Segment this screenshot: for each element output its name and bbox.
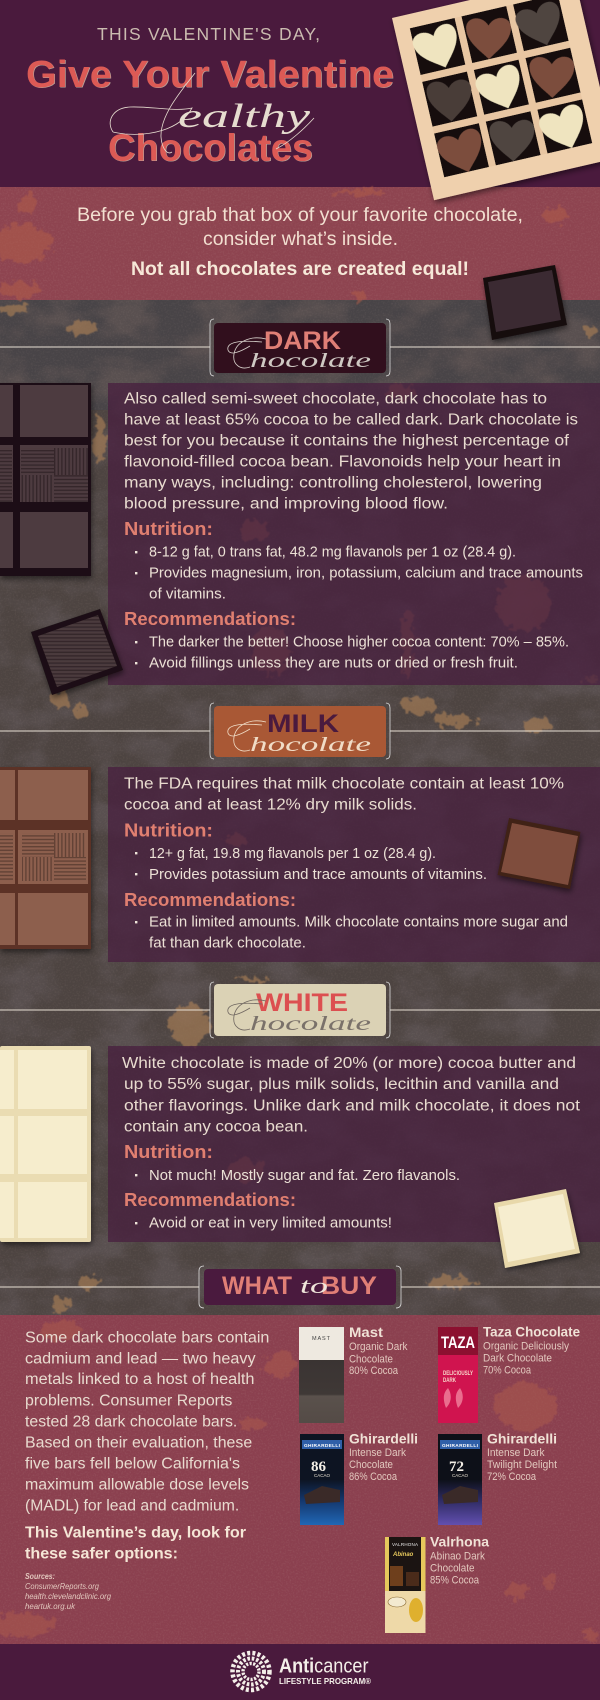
dark nutrition list: Provides magnesium, iron, potassium, calcium and trace amounts — [149, 566, 583, 582]
Ghirardelli 72 label — [487, 1430, 557, 1483]
Ghirardelli 72 label: Ghirardelli — [487, 1430, 557, 1446]
icon: milk chocolate square — [498, 818, 580, 889]
Ghirardelli 72 label: Twilight Delight — [487, 1459, 557, 1471]
milk recommendations list — [135, 915, 568, 952]
dark nutrition list: 8-12 g fat, 0 trans fat, 48.2 mg flavanols per 1 oz (28.4 g). — [149, 545, 516, 561]
image: Ghirardelli 72 bar: 72 — [449, 1459, 464, 1475]
text block: safer options call to action — [25, 1524, 246, 1562]
Ghirardelli 86 label — [349, 1430, 418, 1483]
text block: safer options call to action: these safer options: — [25, 1545, 178, 1562]
text block: safer options call to action: This Valentine’s day, look for — [25, 1524, 246, 1541]
image: Taza bar: DARK — [443, 1378, 456, 1384]
logo wordmark: LIFESTYLE PROGRAM® — [279, 1676, 372, 1686]
milk recommendations heading: Recommendations: — [124, 890, 296, 910]
intro text line 1: Before you grab that box of your favorite chocolate, — [77, 205, 523, 226]
text block: sources: heartuk.org.uk — [25, 1601, 76, 1611]
image: Ghirardelli 86 bar: GHIRARDELLI — [304, 1443, 341, 1449]
white description: other flavorings. Unlike dark and milk chocolate, it does not — [124, 1098, 581, 1115]
milk description: cocoa and at least 12% dry milk solids. — [124, 796, 417, 813]
dark description: have at least 65% cocoa to be called dark. Dark chocolate is — [124, 411, 578, 428]
text block: what to buy description: tested 28 dark chocolate bars. — [25, 1413, 237, 1430]
Mast label: Chocolate — [349, 1353, 393, 1365]
Valrhona label: Valrhona — [430, 1534, 489, 1550]
panel: white chocolate — [108, 1046, 600, 1242]
Ghirardelli 86 label: 86% Cocoa — [349, 1471, 398, 1483]
image: Ghirardelli 72 bar: CACAO — [452, 1473, 469, 1478]
icon: Anticancer logo mark — [232, 1653, 270, 1690]
script word Chocolate: hocolate — [250, 1013, 371, 1035]
panel: dark chocolate — [108, 383, 600, 685]
Taza label: Taza Chocolate — [483, 1324, 580, 1340]
band: introduction — [0, 187, 600, 301]
icon: small dark chocolate piece — [31, 609, 123, 695]
milk nutrition heading: Nutrition: — [124, 821, 213, 841]
Ghirardelli 86 label: Ghirardelli — [349, 1430, 418, 1446]
Valrhona label: Chocolate — [430, 1562, 474, 1574]
image: Ghirardelli 86 bar — [300, 1434, 344, 1525]
product: Taza — [438, 1324, 580, 1423]
icon: white chocolate square — [494, 1189, 580, 1268]
Mast label: Mast — [349, 1324, 383, 1340]
main title line 2: Chocolates — [109, 128, 314, 170]
white description: contain any cocoa bean. — [124, 1119, 308, 1136]
heading word DARK: DARK — [264, 327, 341, 355]
image: Mast bar: MAST — [312, 1336, 331, 1342]
milk description — [124, 775, 564, 813]
main title line 2: Chocolates — [108, 128, 313, 170]
script word Healthy — [110, 73, 314, 153]
image: Ghirardelli 72 bar: GHIRARDELLI — [442, 1443, 479, 1449]
dark description: best for you because it contains the highest percentage of — [124, 432, 570, 449]
text block: sources: health.clevelandclinic.org — [25, 1591, 111, 1601]
milk nutrition list: Provides potassium and trace amounts of vitamins. — [149, 867, 487, 883]
dark recommendations heading: Recommendations: — [124, 609, 296, 629]
image: Ghirardelli 72 bar — [438, 1434, 482, 1525]
white description — [122, 1055, 581, 1136]
dark recommendations list: Avoid fillings unless they are nuts or dried or fresh fruit. — [149, 656, 518, 672]
intro emphasis: Not all chocolates are created equal! — [131, 259, 469, 280]
milk recommendations list: Eat in limited amounts. Milk chocolate contains more sugar and — [149, 915, 568, 931]
Ghirardelli 72 label: 72% Cocoa — [487, 1471, 537, 1483]
footer — [0, 1644, 600, 1700]
script word Chocolate — [228, 1000, 371, 1035]
image: Ghirardelli 86 bar: 86 — [311, 1459, 326, 1475]
main title line 1: Give Your Valentine — [27, 55, 395, 97]
Mast label: 80% Cocoa — [349, 1365, 399, 1377]
icon: dark chocolate square — [483, 265, 567, 340]
white recommendations list: Avoid or eat in very limited amounts! — [149, 1216, 392, 1232]
image: Valrhona bar: VALRHONA — [392, 1542, 418, 1547]
product: Valrhona — [385, 1534, 489, 1633]
Valrhona label: 85% Cocoa — [430, 1574, 480, 1586]
heading: what to buy — [0, 1266, 600, 1308]
product: Ghirardelli 86 — [300, 1430, 418, 1525]
text block: what to buy description: problems. Consumer Reports — [25, 1392, 233, 1409]
dark recommendations list — [135, 635, 569, 672]
image: Valrhona bar: Abinao — [392, 1552, 414, 1558]
Valrhona label — [430, 1534, 489, 1586]
white nutrition list: Not much! Mostly sugar and fat. Zero flavanols. — [149, 1168, 460, 1184]
text block: sources: ConsumerReports.org — [25, 1581, 99, 1591]
Ghirardelli 72 label: Intense Dark — [487, 1447, 545, 1459]
text block: sources: Sources: — [25, 1571, 55, 1581]
band: what to buy background — [0, 1315, 600, 1644]
product: Mast — [299, 1324, 408, 1423]
product: Ghirardelli 72 — [438, 1430, 557, 1525]
Valrhona label: Abinao Dark — [430, 1550, 485, 1562]
text block: what to buy description: (MADL) for lead and cadmium. — [25, 1497, 239, 1514]
script word Chocolate — [228, 338, 371, 372]
script word Chocolate: hocolate — [250, 734, 371, 756]
heading: dark chocolate — [0, 319, 600, 376]
milk description: The FDA requires that milk chocolate contain at least 10% — [124, 775, 564, 792]
Taza label: Dark Chocolate — [483, 1352, 552, 1364]
image: Valrhona bar — [385, 1537, 426, 1633]
white description: up to 55% sugar, plus milk solids, lecithin and vanilla and — [124, 1076, 559, 1093]
text block: what to buy description: five bars fell below California's — [25, 1455, 240, 1472]
Ghirardelli 86 label: Intense Dark — [349, 1447, 406, 1459]
dark nutrition list — [135, 545, 583, 602]
dark description: flavonoid-filled cocoa bean. Flavonoids help your heart in — [124, 454, 561, 471]
dark nutrition heading: Nutrition: — [124, 519, 213, 539]
heading word BUY: BUY — [321, 1272, 377, 1300]
dark description: blood pressure, and improving blood flow. — [124, 496, 448, 513]
dark recommendations list: The darker the better! Choose higher cocoa content: 70% – 85%. — [149, 635, 569, 651]
milk nutrition list: 12+ g fat, 19.8 mg flavanols per 1 oz (28.4 g). — [149, 846, 436, 862]
milk recommendations list: fat than dark chocolate. — [149, 936, 306, 952]
dark description: many ways, including: controlling cholesterol, lowering — [124, 475, 542, 492]
heading word WHAT: WHAT — [222, 1272, 292, 1300]
intro text line 2: consider what’s inside. — [203, 229, 398, 250]
white nutrition heading: Nutrition: — [124, 1142, 213, 1162]
image: Taza bar — [438, 1327, 478, 1423]
dark nutrition list: of vitamins. — [149, 586, 226, 602]
main title line 1: Give Your Valentine — [26, 54, 394, 96]
header band — [0, 0, 600, 187]
textured slate background — [0, 300, 600, 1315]
script word Chocolate: hocolate — [250, 350, 371, 372]
text block: what to buy description: maximum allowable dose levels — [25, 1476, 249, 1493]
text block: what to buy description: Based on their evaluation, these — [25, 1434, 252, 1451]
heading: milk chocolate — [0, 703, 600, 759]
Mast label: Organic Dark — [349, 1341, 408, 1353]
script word Chocolate — [228, 721, 371, 756]
logo wordmark: Anticancer — [279, 1655, 369, 1678]
Taza label — [483, 1324, 580, 1376]
Taza label: 70% Cocoa — [483, 1364, 532, 1376]
script word Healthy: ealthy — [178, 98, 311, 135]
text block: what to buy description: Some dark chocolate bars contain — [25, 1329, 269, 1346]
icon: milk chocolate bar — [0, 767, 91, 949]
Ghirardelli 86 label: Chocolate — [349, 1459, 393, 1471]
script word to: to — [300, 1273, 328, 1298]
Taza label: Organic Deliciously — [483, 1340, 569, 1352]
icon: box of heart chocolates — [392, 0, 600, 200]
icon: dark chocolate bar — [0, 383, 91, 576]
dark description — [124, 390, 578, 513]
Mast label — [349, 1324, 408, 1377]
dark description: Also called semi-sweet chocolate, dark chocolate has to — [124, 390, 547, 407]
text block: what to buy description: metals linked to a host of health — [25, 1371, 254, 1388]
white description: White chocolate is made of 20% (or more) cocoa butter and — [122, 1055, 576, 1072]
panel: milk chocolate — [108, 767, 600, 962]
text block: sources — [25, 1571, 111, 1611]
image: Taza bar: TAZA — [441, 1333, 475, 1352]
milk nutrition list — [135, 846, 487, 883]
kicker text: THIS VALENTINE'S DAY, — [97, 24, 320, 44]
icon: white chocolate bar — [0, 1046, 91, 1242]
title block — [26, 24, 395, 170]
image: Taza bar: DELICIOUSLY — [443, 1371, 473, 1377]
text block: what to buy description — [25, 1329, 269, 1514]
heading word WHITE: WHITE — [256, 989, 348, 1017]
image: Ghirardelli 86 bar: CACAO — [314, 1473, 331, 1478]
white recommendations heading: Recommendations: — [124, 1190, 296, 1210]
heading word MILK: MILK — [267, 710, 339, 738]
text block: what to buy description: cadmium and lead — two heavy — [25, 1350, 256, 1367]
heading: white chocolate — [0, 982, 600, 1038]
